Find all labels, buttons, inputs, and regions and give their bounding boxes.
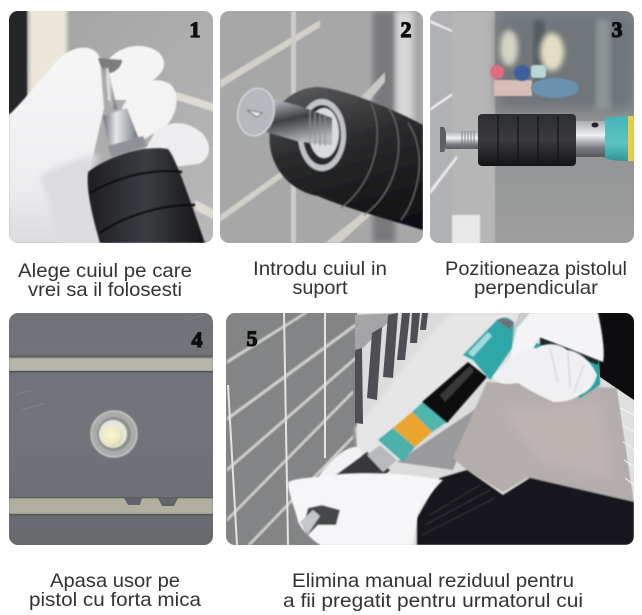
caption 3 — [445, 258, 627, 299]
caption 2: suport — [292, 277, 348, 299]
upper white glove — [493, 313, 604, 402]
panel 4: pressing lightly, nail in wall — [9, 313, 213, 545]
caption 4 — [29, 570, 201, 611]
stone wall with grout — [9, 313, 213, 545]
caption 5: Elimina manual reziduul pentru — [292, 570, 574, 592]
caption 1: Alege cuiul pe care — [18, 260, 192, 282]
caption 1 — [18, 260, 192, 301]
caption 1: vrei sa il folosesti — [28, 279, 182, 301]
white glove holding the nail — [9, 46, 209, 243]
number 2 badge: 2 — [400, 17, 412, 42]
tool: black grip, steel tube, teal grip — [478, 114, 634, 166]
caption 4: pistol cu forta mica — [29, 589, 201, 611]
panel 5: removing residue — [226, 313, 634, 545]
panel 2: inserting the nail — [220, 11, 423, 243]
tiled wall and railing background — [226, 313, 634, 545]
teal handle — [530, 337, 600, 398]
caption 2: Introdu cuiul in — [253, 258, 387, 280]
photo background: tiled wall — [220, 11, 423, 243]
number 1 badge: 1 — [190, 17, 200, 42]
caption 3: Pozitioneaza pistolul — [445, 258, 627, 280]
tool barrel with teal and orange bands — [318, 318, 514, 482]
caption 5 — [283, 570, 583, 612]
blurred background street — [430, 11, 634, 245]
driven nail head — [91, 411, 137, 457]
lower white glove holding the tool tip — [288, 473, 443, 545]
panel 3: positioning perpendicular — [430, 11, 634, 245]
number 5 badge: 5 — [246, 326, 258, 351]
nail and steel shaft — [440, 127, 479, 152]
black tool body — [88, 148, 205, 243]
caption 2 — [253, 258, 387, 299]
number 4 badge: 4 — [192, 327, 202, 352]
lower black sleeve — [417, 470, 634, 545]
number 3 badge: 3 — [612, 17, 622, 42]
caption 3: perpendicular — [474, 277, 599, 299]
nail in chuck — [233, 85, 332, 146]
panel 1: choosing the nail — [5, 5, 215, 243]
black tool with silver ring — [269, 87, 423, 230]
caption 4: Apasa usor pe — [50, 570, 180, 592]
right upper sleeve — [597, 313, 634, 400]
photo background: tiled wall — [5, 5, 215, 243]
caption 5: a fii pregatit pentru urmatorul cui — [283, 590, 583, 612]
nail and chuck — [98, 58, 147, 157]
